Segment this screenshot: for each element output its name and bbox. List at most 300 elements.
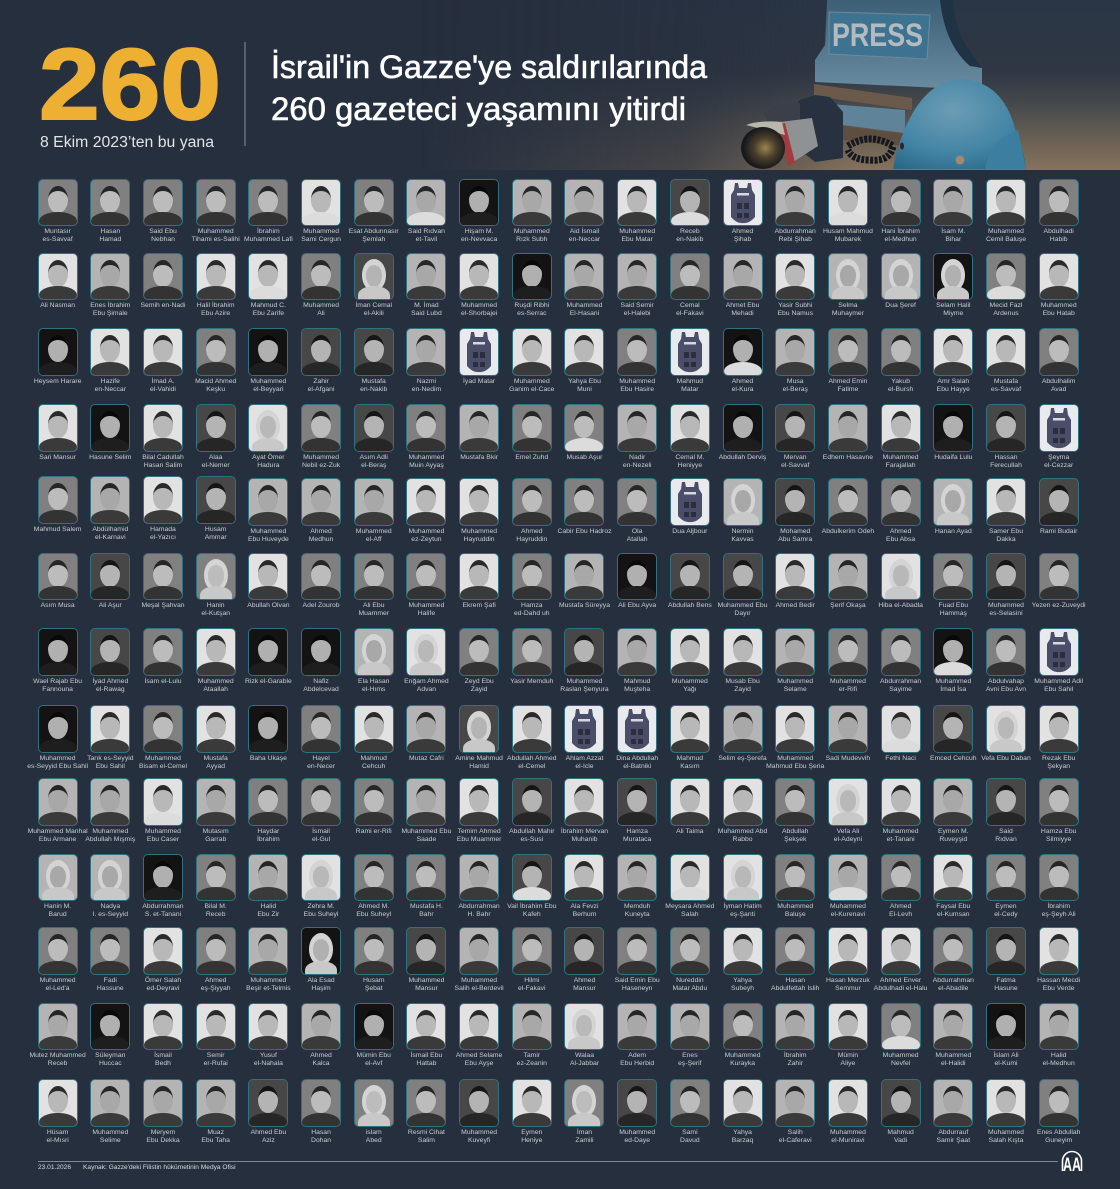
card: Muhammed Ebu Saade	[400, 778, 453, 844]
card: Yasir Subhi Ebu Namus: Yasir Subhi	[778, 302, 812, 309]
icon: camera	[741, 95, 843, 169]
card: Said Rıdvan et-Tavil	[406, 179, 446, 243]
card: Bilal M. Receb: Bilal M.	[205, 903, 227, 910]
card: Emel Zuhd: Emel Zuhd	[515, 454, 548, 460]
card: Şeyma el-Cezzar: Şeyma	[1048, 454, 1069, 460]
card: Ahmed Ebu Absa	[874, 478, 927, 544]
card: Muhammed Adil Ebu Sahil	[1032, 628, 1085, 694]
card: Muhammed es-Selasini: Muhammed	[988, 602, 1024, 609]
card: Muhammed ed-Daye: ed-Daye	[624, 1137, 650, 1144]
title	[271, 49, 707, 127]
card: Nafiz Abdelcevad: Nafiz	[313, 678, 329, 684]
card: Abdurrauf Samir Şaat	[927, 1079, 980, 1145]
card: Muhammed Muin Ayyaş: Muhammed	[408, 454, 444, 460]
card: Muhammed Ebu Hasire	[611, 328, 664, 394]
card: Enğam Ahmed Advan	[400, 628, 453, 694]
card: Tamir ez-Zeanin	[505, 1003, 558, 1069]
card: Mutasım Garrab: Garrab	[205, 836, 226, 843]
card: Yahya Subeyh	[716, 927, 769, 993]
card: Musa el-Beraş	[769, 328, 822, 394]
card: Muhammed El-Hasani	[564, 253, 604, 317]
card: Ahmed M. Ebu Suheyl: Ebu Suheyl	[356, 911, 391, 918]
card: Muhammed Nebil ez-Zuk	[295, 404, 347, 470]
card: Mervan el-Savvaf: Mervan	[784, 454, 807, 460]
card: Abdurrahman Rebi Şihab: Rebi Şihab	[779, 236, 812, 243]
card: Fuad Ebu Hammaş	[927, 553, 980, 619]
card: Muhammed Beşir et-Telmis: Beşir et-Telmis	[246, 985, 291, 992]
card: Muhammed Selame	[769, 628, 822, 694]
card: Muhammed Cemil Baluşe: Cemil Baluşe	[986, 236, 1026, 243]
card: Ahmed Emin Fatime: Fatime	[838, 386, 858, 393]
card: Ahmet Ebu Mehadi	[723, 253, 763, 317]
card: Husam Şebat: Husam	[363, 976, 384, 984]
card: Muhammed Adil Ebu Sahil: Ebu Sahil	[1044, 686, 1073, 693]
card: Mustafa H. Bahr: Bahr	[419, 911, 434, 918]
card: Halid el-Medhun: Halid	[1051, 1052, 1066, 1059]
card: Mahmud Vadi: Vadi	[894, 1137, 907, 1144]
card: Mutasım Garrab: Mutasım	[203, 828, 229, 834]
card: M. İmad Said Lubd	[406, 253, 446, 317]
card: Muhammed Ali: Ali	[317, 310, 325, 317]
card: Halid Ebu Zir: Halid	[261, 903, 276, 910]
card: Muhammed Tihami es-Salihi: Tihami es-Salihi	[192, 236, 240, 243]
card: İsmail Bedh: İsmail	[154, 1052, 172, 1059]
card: Muhammed Farajallah: Muhammed	[883, 454, 919, 460]
card: Memduh Kuneyta: Kuneyta	[625, 911, 650, 918]
card: Ali Aşur	[84, 553, 137, 619]
card: Muhammed er-Rifi: Muhammed	[830, 678, 866, 684]
card: Muhammed Nevfel	[874, 1003, 927, 1069]
card: Halil İbrahim Ebu Azire	[196, 253, 236, 317]
card: Mohamed Abu Samra: Abu Samra	[778, 536, 812, 543]
card: Ali Taima	[664, 778, 716, 844]
card: Muhammed Salih el-Berdevil	[453, 927, 505, 993]
card: Ahmed Şihab	[723, 179, 763, 243]
card: Hasan Dohan: Dohan	[311, 1137, 331, 1144]
card: Dua Aljbour: Dua Aljbour	[672, 528, 707, 534]
card: Wael Rajab Ebu Fannouna	[31, 628, 84, 694]
card: İmad A. el-Vahidi: İmad A.	[151, 378, 174, 384]
card: Rami Budair	[1032, 478, 1085, 544]
card: Muhammed Ebu Huveyde: Muhammed	[250, 528, 286, 534]
card: Muhammed ez-Zeytun: Muhammed	[408, 528, 444, 534]
card: Ali Ebu Muammer	[347, 553, 400, 619]
card: Adem Ebu Herbid	[611, 1003, 664, 1069]
card: Selma Muhaymer	[828, 253, 868, 317]
card: Eymen Heniye: Heniye	[521, 1137, 542, 1144]
card: Edhem Hasavne	[822, 404, 874, 470]
card: Tarık es-Seyyid Ebu Sahil: Tarık es-Seyyid	[87, 754, 134, 762]
card: Abdulhalim Avad: Avad	[1051, 386, 1066, 393]
card: Muhammed Bisam el-Cemel: Bisam el-Cemel	[139, 763, 187, 770]
card: Abdulvahap Avni Ebu Avn	[980, 628, 1032, 694]
card: Alaa el-Nemer: Alaa	[209, 454, 222, 460]
card: Muhammed el-Kurenavi: el-Kurenavi	[831, 911, 865, 918]
card: Sari Mansur	[31, 404, 84, 470]
card: Vefa Ebu Daban: Vefa Ebu Daban	[981, 754, 1031, 762]
card: Meşal Şahvan	[137, 553, 189, 619]
card: Abdurrahman S. et-Tanani: Abdurrahman	[142, 903, 184, 910]
card: Emced Cehcuh: Emced Cehcuh	[930, 754, 977, 762]
card: Yezen ez-Zuveydi: Yezen ez-Zuveydi	[1032, 602, 1086, 609]
card: Ahmed Medhun: Ahmed	[310, 528, 332, 534]
card: Mahmud Cehcuh	[347, 705, 400, 771]
card: Muhammed Baluşe: Muhammed	[777, 903, 813, 910]
card: Muhammed er-Rifi: er-Rifi	[839, 686, 857, 693]
card: Fadi Hassune: Hassune	[97, 985, 124, 992]
card: Abdülhamid el-Karnavi	[84, 476, 137, 542]
card: Haydar İbrahim	[242, 778, 295, 844]
card: Muhammed Ebu Huveyde	[242, 478, 295, 544]
card: Muhammed Ebu Hatab: Ebu Hatab	[1043, 310, 1075, 317]
card: Muhammed Rızk Subh: Muhammed	[514, 228, 550, 235]
card: Muhammed ed-Daye: Muhammed	[619, 1128, 655, 1136]
card: Macid Ahmed Keşku	[189, 328, 242, 394]
card: Muhammed Beşir et-Telmis	[242, 927, 295, 993]
card: Muhammed Beşir et-Telmis: Muhammed	[250, 976, 286, 984]
card: Halil İbrahim Ebu Azire: Ebu Azire	[201, 310, 230, 317]
card: Mahmud Muşteha	[611, 628, 664, 694]
card: Ela Hasan el-Hıms: Ela Hasan	[358, 678, 389, 684]
card: Muhammed Ebu Hatab	[1032, 253, 1085, 319]
card: Macid Ahmed Keşku: Macid Ahmed	[195, 378, 236, 384]
card: Meryem Ebu Dekka: Ebu Dekka	[146, 1137, 180, 1144]
card: Selam Halil Miyme: Selam Halil	[936, 302, 970, 309]
card: Muhammed Manhal Ebu Armane: Ebu Armane	[39, 836, 76, 843]
card: Hiba el-Abadla: Hiba el-Abadla	[878, 602, 923, 609]
card: Cabir Ebu Hadroz: Cabir Ebu Hadroz	[557, 528, 612, 534]
card: Muhammed Ebu Saade: Saade	[417, 836, 436, 843]
card: İmad A. el-Vahidi: el-Vahidi	[150, 386, 176, 393]
card: Semir er-Rufai	[189, 1003, 242, 1069]
card: Muhammed Ganim el-Cace: Ganim el-Cace	[509, 386, 554, 393]
card: Muhammed Ebu Dayır: Dayır	[734, 610, 751, 617]
card: Hazife en-Neccar: Hazife	[101, 378, 120, 384]
card: Muhammed el-Shorbajei: el-Shorbajei	[461, 310, 497, 317]
card: İsmail Ebu Hattab	[400, 1003, 453, 1069]
card: Samer Ebu Dakka	[980, 478, 1032, 544]
card: Halid el-Medhun: el-Medhun	[1043, 1060, 1075, 1067]
card: Tamir ez-Zeanin: Tamir	[523, 1052, 540, 1059]
card: Yezen ez-Zuveydi	[1032, 553, 1085, 619]
card: Temim Ahmed Ebu Muammer: Ebu Muammer	[457, 836, 501, 843]
card: Hudaifa Lulu	[927, 404, 980, 470]
card: Cemal M. Heniyye: Heniyye	[678, 462, 702, 469]
card: Muhammed el-Halidi: el-Halidi	[941, 1060, 966, 1067]
card: Rami er-Rifi: Rami er-Rifi	[356, 828, 392, 834]
icon: cable	[848, 139, 893, 160]
card: Husam Mahmud Mubarek: Husam Mahmud	[823, 228, 873, 235]
card: Musa el-Beraş: el-Beraş	[783, 386, 808, 393]
card: Macid Ahmed Keşku: Keşku	[206, 386, 225, 393]
card: Semir er-Rufai: Semir	[207, 1052, 225, 1059]
card: Abdulhadi Habib: Habib	[1050, 236, 1068, 243]
card: Husam Ammar	[189, 476, 242, 542]
card: Nermin Kavvas: Nermin	[732, 528, 754, 534]
card: Bilal Cadullah Hasan Salim: Hasan Salim	[144, 462, 182, 469]
card: Abdurrahman S. et-Tanani	[137, 854, 189, 920]
card: Muhammed Nebil ez-Zuk: Muhammed	[303, 454, 339, 460]
card: Muhammed el-Aff: el-Aff	[366, 536, 382, 543]
card: Mahmud Cehcuh: Cehcuh	[362, 763, 385, 770]
card: Muhammed Ebu Matar: Ebu Matar	[621, 236, 653, 243]
card: Yasir Subhi Ebu Namus	[775, 253, 815, 317]
card: Abdurrahman H. Bahr	[453, 854, 505, 920]
card: Muhammed Ganim el-Cace: Muhammed	[514, 378, 550, 384]
card: Mustafa Bkir: Mustafa Bkir	[460, 454, 498, 460]
card: Muhammed Hayruddin: Hayruddin	[464, 536, 495, 543]
card: Adem Ebu Herbid: Adem	[628, 1052, 646, 1059]
sand background	[492, 58, 1120, 170]
card: Muhammed ez-Zeytun	[400, 478, 453, 544]
card: Halid Ebu Zir	[242, 854, 295, 920]
card: Muhammed Selime	[84, 1079, 137, 1145]
card: Alaa el-Nemer: el-Nemer	[202, 462, 230, 469]
card: Musa el-Beraş: Musa	[787, 378, 804, 384]
card: Tarık es-Seyyid Ebu Sahil: Ebu Sahil	[96, 763, 125, 770]
card: Husam Şebat	[347, 927, 400, 993]
card: M. İmad Said Lubd: M. İmad	[414, 302, 439, 309]
card: Muhammed Baluşe: Baluşe	[785, 911, 806, 918]
card: Rizk el-Garable: Rizk el-Garable	[245, 678, 292, 684]
card: Muhammed Ebu Hatab: Muhammed	[1041, 302, 1077, 309]
card: Yahya Ebu Muni: Muni	[577, 386, 592, 393]
card: Husam Ammar: Husam	[205, 526, 226, 532]
card: Receb en-Nakib: en-Nakib	[676, 236, 703, 243]
card: Adel Zourob	[295, 553, 347, 619]
card: Nermin Kavvas	[716, 478, 769, 544]
card: Abdulvahap Avni Ebu Avn: Avni Ebu Avn	[986, 686, 1026, 693]
card: Ali Nasman: Ali Nasman	[40, 302, 75, 309]
card: Abdullah Şekşek	[769, 778, 822, 844]
card: Muhammed el-Muniravi	[822, 1079, 874, 1145]
card: Abdulvahap Avni Ebu Avn: Abdulvahap	[988, 678, 1024, 684]
card: Said Semir el-Halebi: Said Semir	[621, 302, 654, 309]
card: Muhammed Mahmud Ebu Şeria	[769, 705, 822, 771]
card: Mahmud C. Ebu Zarife	[248, 253, 288, 317]
card: Ali Ebu Muammer: Muammer	[358, 610, 389, 617]
card: Sadi Mudevvih: Sadi Mudevvih	[826, 754, 870, 762]
card: Mustafa Bkir	[453, 404, 505, 470]
card: Abdurrahman Rebi Şihab: Abdurrahman	[775, 228, 816, 235]
card: İsam el-Lulu	[137, 628, 189, 694]
card: Mümin Aliye	[822, 1003, 874, 1069]
card: Meysara Ahmed Salah: Meysara Ahmed	[665, 903, 714, 910]
card: Ahmed el-Kura	[716, 328, 769, 394]
card: Bilal Cadullah Hasan Salim	[137, 404, 189, 470]
card: Ahmed El-Levh: El-Levh	[889, 911, 912, 918]
card: Hasan Abdulfettah Islih: Hasan	[785, 976, 805, 984]
card: Ala Fevzi Berhum	[558, 854, 611, 920]
card: Meşal Şahvan: Meşal Şahvan	[141, 602, 185, 609]
card: Muhammed Mansur: Mansur	[415, 985, 438, 992]
card: İsmail Ebu Hattab: Hattab	[416, 1060, 436, 1067]
card: Hanin el-Kutşan: el-Kutşan	[201, 610, 230, 617]
card: Abullah Olvan: Abullah Olvan	[247, 602, 290, 609]
card: Enes İbrahim Ebu Şimale: Enes İbrahim	[90, 302, 130, 309]
card: Hani İbrahim el-Medhun: Hani İbrahim	[881, 228, 920, 235]
card: Faysal Ebu el-Kumsan: el-Kumsan	[937, 911, 970, 918]
card: Ahlam Azzat el-Icle: Ahlam Azzat	[566, 754, 603, 762]
card: Nazmi en-Nedim	[400, 328, 453, 394]
card: Cabir Ebu Hadroz	[558, 478, 611, 544]
card: Temim Ahmed Ebu Muammer: Temim Ahmed	[458, 828, 501, 834]
card: Yakub el-Bursh	[874, 328, 927, 394]
card: Alaa el-Nemer	[189, 404, 242, 470]
card: Muhammed Ebu Dayır: Muhammed Ebu	[718, 602, 767, 609]
card: Mahmud Salem	[31, 476, 84, 542]
row 6	[31, 553, 1091, 619]
card: Rami Budair: Rami Budair	[1040, 528, 1077, 534]
row 7	[31, 628, 1091, 694]
card: Muhammed el-Shorbajei	[459, 253, 499, 317]
card: Ahmed Medhun	[295, 478, 347, 544]
card: Abdullah Derviş: Abdullah Derviş	[719, 454, 766, 460]
card: Esat Abdunnasır Şemlah: Esat Abdunnasır	[349, 228, 399, 235]
card: Süleyman Huccac: Süleyman	[95, 1052, 125, 1059]
card: Faysal Ebu el-Kumsan: Faysal Ebu	[936, 903, 970, 910]
card: Ala Esad Haşim: Haşim	[311, 985, 331, 992]
card: Musab Aşur: Musab Aşur	[567, 454, 602, 460]
card: Ahmed Hayruddin: Hayruddin	[516, 536, 547, 543]
card: Muhammed el-Aff: Muhammed	[356, 528, 392, 534]
card: Abdullah Şekşek: Şekşek	[784, 836, 806, 843]
card: Ahmed El-Levh	[874, 854, 927, 920]
card: Ola Atallah: Ola	[632, 528, 642, 534]
card: Adel Zourob: Adel Zourob	[303, 602, 340, 609]
card: Zehra M. Ebu Suheyl	[295, 854, 347, 920]
card: Walaa Al-Jabbar	[558, 1003, 611, 1069]
card: M. İmad Said Lubd: Said Lubd	[411, 310, 442, 317]
card: Rizk el-Garable	[242, 628, 295, 694]
card: Hamza Murataca: Hamza	[626, 828, 648, 834]
card: İman Cemal el-Akili: İman Cemal	[355, 302, 392, 309]
card: Mecid Fazl Ardenus: Mecid Fazl	[990, 302, 1022, 309]
card: Dina Abdullah el-Batniki: Dina Abdullah	[616, 754, 658, 762]
card: Yasir Subhi Ebu Namus: Ebu Namus	[777, 310, 813, 317]
card: Ahlam Azzat el-Icle: el-Icle	[575, 763, 594, 770]
card: Ahmed M. Ebu Suheyl	[347, 854, 400, 920]
card: Eymen el-Cedy: Eymen	[995, 903, 1017, 910]
card: Hayel en-Necer: Hayel	[312, 754, 330, 762]
card: Ayat Ömer Hadura: Ayat Ömer	[252, 454, 285, 460]
icon: press vest	[814, 0, 982, 146]
card: Mahmud Kasım	[664, 705, 716, 771]
card: Ali Aşur: Ali Aşur	[99, 602, 122, 609]
card: Fadi Hassune	[84, 927, 137, 993]
card: Eymen M. Ruveyşid: Eymen M.	[938, 828, 969, 834]
card: Mecid Fazl Ardenus: Ardenus	[993, 310, 1019, 317]
card: Ahmed Emin Fatime	[822, 328, 874, 394]
card: Muhammed İmad İsa: Muhammed	[935, 678, 971, 684]
card: Dina Abdullah el-Batniki	[611, 705, 664, 771]
card: Semir er-Rufai: er-Rufai	[204, 1060, 228, 1067]
card: İsmail Ebu Hattab: İsmail Ebu	[411, 1052, 442, 1059]
card: Muhammed Salah Kışta: Salah Kışta	[989, 1137, 1023, 1144]
card: Hani İbrahim el-Medhun	[881, 179, 921, 243]
card: Nafiz Abdelcevad	[295, 628, 347, 694]
card: Abdurrahman Rebi Şihab	[774, 179, 816, 243]
card: Süleyman Huccac: Huccac	[99, 1060, 122, 1067]
card: Zeyd Ebu Zayid: Zayid	[471, 686, 487, 693]
card: Salih el-Caferavi	[769, 1079, 822, 1145]
card: Ahmed Medhun: Medhun	[309, 536, 333, 543]
card: Muhammed Ebu Dayır	[716, 553, 769, 619]
row 10	[31, 854, 1091, 920]
card: İbrahim eş-Şeyh Ali: İbrahim	[1047, 903, 1070, 910]
card: Ahmed Kalca: Kalca	[313, 1060, 330, 1067]
card: Receb en-Nakib	[670, 179, 710, 243]
card: Cemal M. Heniyye	[664, 404, 716, 470]
card: Vefa Ali el-Adeyni: Vefa Ali	[837, 828, 859, 834]
row 8	[31, 705, 1091, 771]
card: Muhammed Ebu Saade: Muhammed Ebu	[401, 828, 451, 834]
card: Selim eş-Şerefa	[716, 705, 769, 771]
card: Muhammed Nevfel: Nevfel	[891, 1060, 910, 1067]
card: Muaz Ebu Taha	[189, 1079, 242, 1145]
card: Hasune Selim	[84, 404, 137, 470]
card: Dina Abdullah el-Batniki: el-Batniki	[623, 763, 651, 770]
card: Abdurrahman el-Abadile: el-Abadile	[938, 985, 968, 992]
card: Said Semir el-Halebi: el-Halebi	[624, 310, 651, 317]
card: Zehra M. Ebu Suheyl: Zehra M.	[307, 903, 335, 910]
card: Muhammed Ataallah	[189, 628, 242, 694]
card: Mahmud Matar: Matar	[681, 386, 699, 393]
card: Abdurrahman H. Bahr: Abdurrahman	[459, 903, 500, 910]
card: Ahlam Azzat el-Icle	[558, 705, 611, 771]
card: Hasan Hamad: Hasan	[100, 228, 120, 235]
card: Ahmed eş-Şiyyah: Ahmed	[205, 976, 226, 984]
card: Husam Ammar: Ammar	[205, 534, 227, 541]
card: Şerif Okaşa: Şerif Okaşa	[830, 602, 866, 609]
card: Memduh Kuneyta	[611, 854, 664, 920]
card: Ahmed Selame Ebu Ayşe: Ahmed Selame	[456, 1052, 502, 1059]
card: Abdullah Ahmed el-Cemel: el-Cemel	[518, 763, 545, 770]
card: Said Emin Ebu Haseneyn	[611, 927, 664, 993]
card: Abdulkerim Odeh	[822, 478, 874, 544]
card: Hilmi el-Fakavi: el-Fakavi	[518, 985, 546, 992]
card: Ahmed Enver Abdulhadi el-Halu: Ahmed Enver	[880, 976, 921, 984]
card: Dua Şeref	[881, 253, 921, 309]
card: Said Rıdvan et-Tavil: Said Rıdvan	[408, 228, 445, 235]
card: Ruşdi Ribhi es-Serrac: es-Serrac	[517, 310, 547, 317]
card: Ekrem Şafi: Ekrem Şafi	[462, 602, 496, 609]
card: Sari Mansur: Sari Mansur	[39, 454, 76, 460]
card: Enes eş-Şerif: Enes	[682, 1052, 698, 1059]
card: Eymen el-Cedy: el-Cedy	[994, 911, 1018, 918]
card: Fadi Hassune: Fadi	[104, 976, 117, 984]
card: Fethi Naci: Fethi Naci	[885, 754, 916, 762]
card: Ola Atallah	[611, 478, 664, 544]
card: Mustafa en-Nakib: Mustafa	[362, 378, 386, 384]
card: Muhammed Kurayka: Kurayka	[730, 1060, 755, 1067]
card: Vail İbrahim Ebu Kafeh	[505, 854, 558, 920]
card: Hilmi el-Fakavi: Hilmi	[524, 976, 539, 984]
card: Asım Adli el-Beraş: Asım Adli	[360, 454, 388, 460]
card: İbrahim Muhammed Lafi: İbrahim	[257, 228, 280, 235]
card: Hazife en-Neccar: en-Neccar	[95, 386, 126, 393]
card: Muhammed Sami Cergun: Sami Cergun	[301, 236, 341, 243]
card: Yakub el-Bursh: el-Bursh	[888, 386, 913, 393]
card: İbrahim Zahir	[769, 1003, 822, 1069]
card: Muhammed Muin Ayyaş	[400, 404, 453, 470]
card: Mustafa en-Nakib	[347, 328, 400, 394]
card: Fuad Ebu Hammaş: Hammaş	[940, 610, 967, 617]
card: Muhammed Yağı: Muhammed	[672, 678, 708, 684]
card: Ahmed Enver Abdulhadi el-Halu: Abdulhadi el-Halu	[874, 985, 927, 992]
card: Muhammed Ali	[301, 253, 341, 317]
card: Mahmud Vadi: Mahmud	[887, 1128, 914, 1136]
